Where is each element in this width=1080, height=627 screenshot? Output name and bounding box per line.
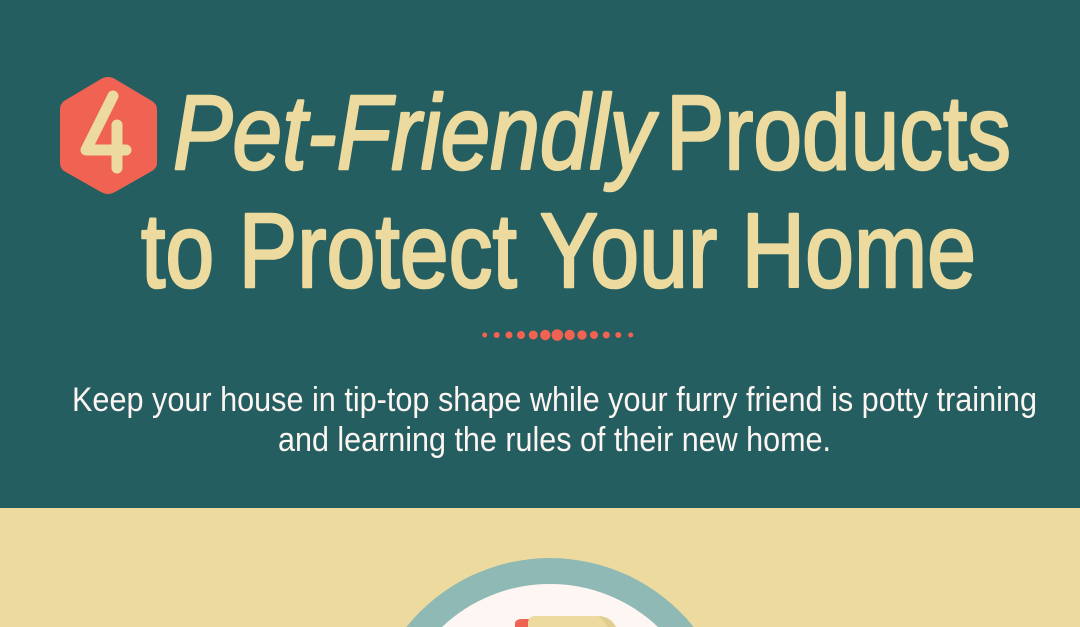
subtitle [72,381,1037,459]
subtitle line 2: and learning the rules of their new home. [278,421,831,459]
title line 1 italic: Pet-Friendly [173,74,659,192]
title [60,74,1011,310]
dotted divider [482,329,633,341]
title line 1 roman: Products [666,74,1011,192]
icon: red hexagon badge with number 4 [60,77,157,194]
product icon top [515,616,616,627]
icon: circular product badge, cropped [406,558,694,627]
panel: cream lower background [0,508,1080,627]
